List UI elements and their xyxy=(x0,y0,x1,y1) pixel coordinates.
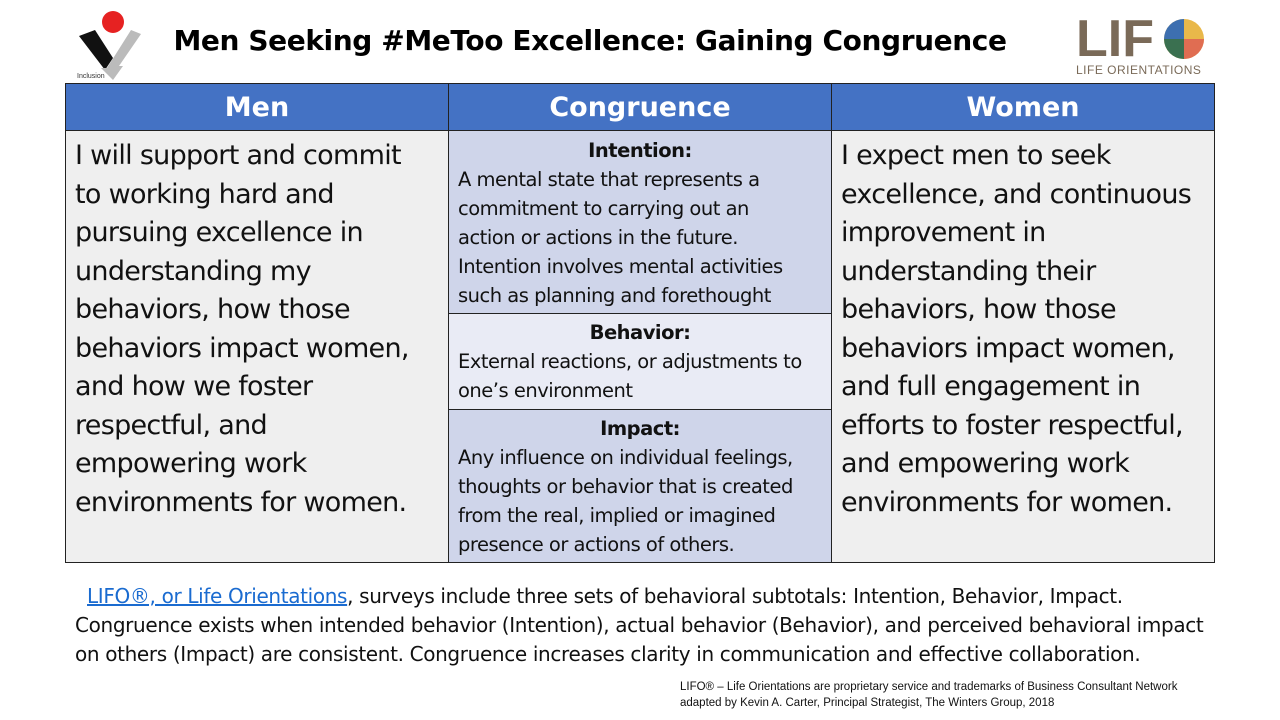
panel: men text: respectful, and xyxy=(75,410,267,440)
panel: behavior: one’s environment xyxy=(458,379,633,402)
panel: women text: excellence, and continuous xyxy=(841,178,1191,210)
panel: women text: I expect men to seek xyxy=(841,140,1111,171)
panel: women text: and empowering work xyxy=(841,448,1129,479)
panel: impact: presence or actions of others. xyxy=(458,533,734,556)
text block: explanation xyxy=(75,584,1204,666)
logo: LIFO: LIF xyxy=(1076,10,1154,68)
panel: impact: thoughts or behavior that is created xyxy=(458,475,793,498)
panel: men text: I will support and commit xyxy=(75,140,401,171)
logo: inclusion xyxy=(77,11,141,80)
footnote: LIFO® – Life Orientations are proprietary service and trademarks of Business Consultant Network xyxy=(680,681,1177,693)
panel: intention: such as planning and forethought xyxy=(458,284,771,307)
header: Congruence: Congruence xyxy=(549,92,731,123)
panel: women text: environments for women. xyxy=(841,486,1172,518)
panel: men text: empowering work xyxy=(75,448,307,479)
panel: women text: efforts to foster respectful, xyxy=(841,410,1183,440)
table xyxy=(65,83,1215,563)
panel: men text: behaviors impact women, xyxy=(75,332,409,364)
header: Women xyxy=(831,83,1215,131)
header: Women: Women xyxy=(966,92,1080,123)
header: Men: Men xyxy=(225,92,289,123)
logo: LIFO xyxy=(1076,10,1204,77)
panel: intention: A mental state that represents a xyxy=(458,168,760,191)
panel: men text: understanding my xyxy=(75,256,311,286)
panel: impact: Impact: xyxy=(600,417,680,440)
title: Men Seeking #MeToo Excellence: Gaining Congruence xyxy=(173,24,1007,57)
panel: women text: behaviors, how those xyxy=(841,294,1116,325)
panel: women text: improvement in xyxy=(841,217,1046,248)
text block: explanation: Congruence exists when intended behavior (Intention), actual behavior (Behavior), and perceived behavioral impact xyxy=(75,613,1203,637)
panel: men text: environments for women. xyxy=(75,486,406,518)
panel: behavior: External reactions, or adjustments to xyxy=(458,350,802,373)
panel: men text: behaviors, how those xyxy=(75,294,350,325)
panel: intention: commitment to carrying out an xyxy=(458,197,749,220)
logo: inclusion: Inclusion xyxy=(77,73,105,80)
panel: women text: understanding their xyxy=(841,256,1095,286)
panel: intention: Intention involves mental activities xyxy=(458,255,783,278)
panel: impact: Any influence on individual feelings, xyxy=(458,446,793,469)
panel: women text: and full engagement in xyxy=(841,371,1140,402)
header: Men xyxy=(65,83,449,131)
panel: intention: action or actions in the future. xyxy=(458,226,738,249)
logo: LIFO: LIFE ORIENTATIONS xyxy=(1076,63,1201,77)
panel: behavior xyxy=(448,313,832,410)
panel: impact: from the real, implied or imagined xyxy=(458,504,775,527)
panel: men text: pursuing excellence in xyxy=(75,217,363,248)
panel: men text: and how we foster xyxy=(75,371,312,402)
text block: explanation: on others (Impact) are consistent. Congruence increases clarity in communication and effective collaboration. xyxy=(75,642,1140,666)
panel: intention: Intention: xyxy=(588,139,692,162)
panel: men text xyxy=(65,130,449,563)
header: Congruence xyxy=(448,83,832,131)
panel: women text: behaviors impact women, xyxy=(841,332,1175,364)
panel: impact xyxy=(448,409,832,563)
panel: behavior: Behavior: xyxy=(590,321,690,344)
panel: intention xyxy=(448,130,832,314)
text block: explanation: LIFO®, or Life Orientations, surveys include three sets of behavioral subtotals: Intention, Behavior, Impact. xyxy=(87,584,1123,608)
panel: women text xyxy=(831,130,1215,563)
footnote xyxy=(680,681,1178,709)
footnote: adapted by Kevin A. Carter, Principal Strategist, The Winters Group, 2018 xyxy=(680,697,1054,709)
panel: men text: to working hard and xyxy=(75,178,334,210)
